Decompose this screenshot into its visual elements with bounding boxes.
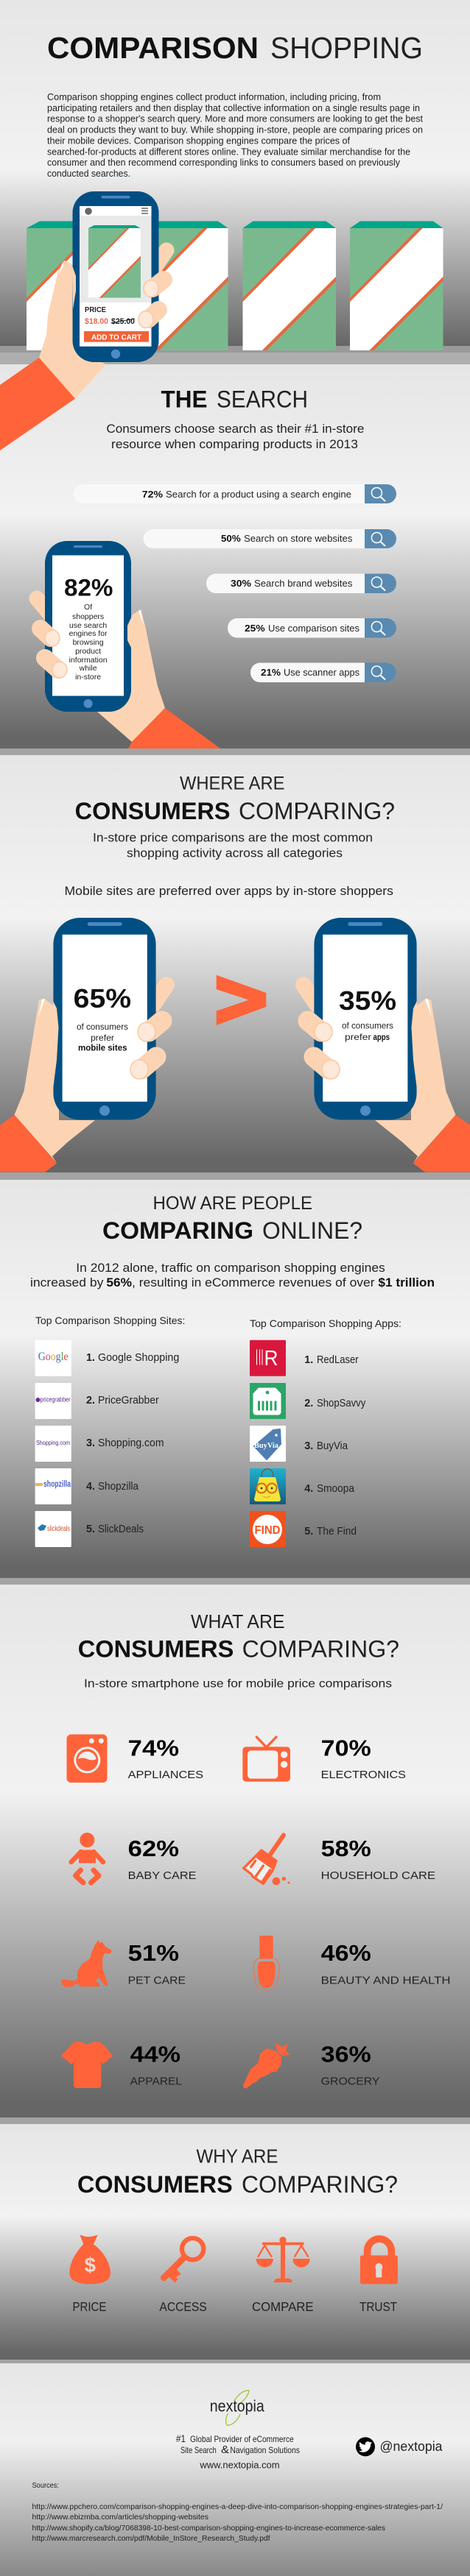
box 1 — [27, 221, 119, 350]
phone screen with stat: engines for — [69, 629, 108, 638]
phone screen with stat: while — [79, 664, 97, 673]
app 3: buyvia: 3. — [304, 1440, 313, 1452]
heading: where are consumers comparing: COMPARING? — [239, 798, 395, 824]
phone screen with stat: use search — [69, 621, 107, 630]
category: electronics: ELECTRONICS — [321, 1769, 406, 1781]
online subtitle: $1 trillion — [378, 1275, 435, 1289]
phone screen: PRICE — [85, 306, 106, 314]
search subtitle: resource when comparing products in 2013 — [111, 437, 358, 451]
intro paragraph: consumer and then recommend corresponding links to consumers based on previously — [47, 158, 401, 168]
app 3: buyvia — [250, 1426, 348, 1462]
site 5: slickdeals — [35, 1511, 144, 1547]
search bar 30% — [206, 574, 396, 593]
category: appliances: APPLIANCES — [128, 1769, 203, 1781]
reason: trust: TRUST — [359, 2299, 397, 2314]
search bar 21% — [250, 662, 396, 682]
hand holding phone with product — [0, 191, 166, 450]
stat: 35% — [339, 986, 396, 1042]
search bar 30%: Search brand websites — [254, 578, 353, 589]
where subtitle: Mobile sites are preferred over apps by in-store shoppers — [65, 884, 393, 898]
site 4: shopzilla: shopzilla — [43, 1479, 71, 1489]
nextopia logo: nextopia — [210, 2397, 264, 2416]
sources: http://www.ppchero.com/comparison-shopping-engines-a-deep-dive-into-comparison-shopping-engines-strategies-part-1/ — [32, 2502, 443, 2511]
search bar 72%: 72% — [142, 489, 163, 500]
intro paragraph: their mobile devices. Comparison shopping engines compare the prices of — [47, 135, 351, 146]
app 1: redlaser — [250, 1340, 359, 1376]
company tagline: Site Search — [180, 2445, 217, 2455]
app 4: smoopa: Smoopa — [317, 1482, 355, 1495]
sources: http://www.ebizmba.com/articles/shopping-websites — [32, 2513, 208, 2522]
top comparison shopping sites — [35, 1314, 185, 1547]
site 5: slickdeals: slickdeals — [47, 1525, 70, 1533]
company tagline — [176, 2432, 300, 2471]
icon: broom — [244, 1835, 290, 1885]
thumb overlap — [127, 609, 147, 648]
search bar 21%: 21% — [261, 667, 281, 678]
site 1: google — [35, 1340, 179, 1376]
finger behind phone — [153, 985, 166, 1005]
heading: how are people comparing online — [102, 1193, 362, 1244]
category: household care — [244, 1835, 435, 1885]
site 5: slickdeals: SlickDeals — [98, 1523, 144, 1535]
reason: access: ACCESS — [159, 2299, 207, 2314]
thumb overlap — [53, 1001, 59, 1089]
reason: access — [159, 2238, 207, 2314]
heading: how are people comparing online: COMPARING — [102, 1217, 253, 1244]
icon: nail polish — [253, 1936, 279, 1990]
phone screen with stat: 82% — [64, 575, 113, 601]
stat: 65%: prefer — [91, 1033, 114, 1043]
company tagline: & — [221, 2444, 229, 2456]
phone screen with stat: in-store — [75, 673, 101, 682]
phone screen: ADD TO CART — [91, 334, 141, 342]
stat: 35%: 35% — [339, 986, 396, 1016]
top comparison shopping apps — [250, 1317, 401, 1547]
heading: where are consumers comparing — [75, 774, 395, 824]
intro paragraph — [47, 92, 424, 179]
finger lower — [130, 1057, 156, 1079]
sources: Sources: — [32, 2481, 59, 2490]
site 1: google: Google — [38, 1351, 69, 1363]
stat: 65% — [74, 983, 131, 1052]
heading: how are people comparing online: ONLINE? — [262, 1217, 362, 1244]
category: grocery — [243, 2042, 380, 2088]
icon: television — [242, 1737, 290, 1782]
twitter handle — [356, 2437, 443, 2456]
phone screen: $18.00 — [85, 317, 108, 326]
category: baby care — [71, 1833, 197, 1883]
finger middle — [41, 629, 60, 646]
search subtitle — [106, 422, 364, 451]
search bar 25% — [228, 618, 396, 637]
category: household care: 58% — [321, 1836, 371, 1861]
site 3: shopping.com: 3. — [86, 1437, 95, 1449]
sleeve — [0, 1115, 57, 1172]
greater-than sign — [217, 975, 266, 1025]
search subtitle: Consumers choose search as their #1 in-store — [106, 422, 364, 436]
intro paragraph: conducted searches. — [47, 169, 130, 179]
app 3: buyvia: BuyVia — [254, 1442, 278, 1450]
stat: 35%: prefer — [345, 1032, 371, 1042]
intro paragraph: searched-for-products at different stores online. They evaluate similar merchandise for the — [47, 147, 410, 158]
sources: http://www.marcresearch.com/pdf/Mobile_InStore_Research_Study.pdf — [32, 2534, 270, 2543]
phone body — [72, 191, 159, 362]
title — [47, 31, 423, 65]
reason: compare — [252, 2237, 314, 2314]
product boxes on shelf — [27, 221, 443, 350]
nextopia logo — [210, 2391, 264, 2425]
heading: why are consumers comparing: WHY ARE — [196, 2146, 278, 2167]
icon: dog — [61, 1940, 112, 1987]
finger behind phone — [37, 598, 50, 615]
heading: what are consumers comparing: COMPARING? — [242, 1635, 399, 1662]
left hand and phone: mobile sites — [0, 918, 166, 1172]
icon: money bag: $ — [85, 2254, 96, 2276]
heading: why are consumers comparing — [77, 2146, 398, 2198]
title: SHOPPING — [270, 31, 423, 65]
category: appliances — [66, 1734, 203, 1783]
heading: how are people comparing online: HOW ARE PEOPLE — [153, 1193, 312, 1214]
heading: the search: SEARCH — [217, 386, 308, 413]
palm — [15, 999, 95, 1163]
icon: twitter — [356, 2437, 375, 2456]
stat: 35%: apps — [373, 1032, 390, 1042]
phone body — [45, 541, 131, 712]
box 4 — [350, 221, 443, 350]
site 1: google: Google Shopping — [98, 1351, 179, 1364]
icon: padlock — [360, 2239, 398, 2284]
online subtitle — [30, 1261, 435, 1289]
icon: t-shirt — [61, 2042, 113, 2088]
palm and thumb — [97, 609, 165, 742]
heading: what are consumers comparing: WHAT ARE — [191, 1610, 284, 1632]
stat: 65%: 65% — [74, 983, 131, 1013]
site 3: shopping.com: Shopping.com — [98, 1437, 164, 1449]
phone screen — [80, 196, 152, 358]
search bar 50% — [143, 529, 396, 548]
category: grocery: GROCERY — [321, 2076, 380, 2087]
online subtitle: , resulting in eCommerce revenues of over — [132, 1275, 375, 1289]
site 4: shopzilla — [35, 1468, 139, 1504]
search bar 21%: Use scanner apps — [284, 667, 359, 678]
phone — [53, 918, 156, 1120]
icon: washing machine — [66, 1734, 108, 1783]
where subtitle: shopping activity across all categories — [127, 846, 343, 860]
app 2: shopsavvy: ShopSavvy — [317, 1397, 366, 1409]
app 4: smoopa: 4. — [304, 1482, 313, 1495]
company tagline: Navigation Solutions — [230, 2445, 300, 2455]
heading: where are consumers comparing: CONSUMERS — [75, 798, 230, 824]
app 1: redlaser: 1. — [304, 1354, 313, 1366]
app 1: redlaser: RedLaser — [317, 1354, 359, 1366]
app 5: the find: The Find — [317, 1525, 357, 1538]
category: pet care: PET CARE — [128, 1975, 186, 1987]
sleeve — [0, 358, 75, 450]
site 4: shopzilla: 4. — [86, 1480, 95, 1493]
site 3: shopping.com: Shopping.com — [36, 1440, 70, 1446]
search bar 25%: 25% — [245, 623, 265, 634]
stat: 65%: of consumers — [77, 1022, 128, 1032]
app 4: smoopa — [250, 1468, 355, 1504]
category: baby care: 62% — [128, 1836, 179, 1861]
where subtitle — [65, 830, 393, 898]
intro paragraph: Comparison shopping engines collect product information, including pricing, from — [47, 92, 381, 102]
category: beauty and health: BEAUTY AND HEALTH — [321, 1975, 451, 1987]
finger behind phone — [152, 250, 166, 271]
site 2: pricegrabber: PriceGrabber — [98, 1394, 159, 1406]
app 1: redlaser: R — [264, 1347, 278, 1370]
search bar 50%: 50% — [221, 533, 241, 544]
category: electronics: 70% — [321, 1735, 371, 1761]
reason: price — [69, 2235, 111, 2314]
category: appliances: 74% — [128, 1735, 179, 1761]
category: apparel: 44% — [130, 2042, 180, 2067]
online subtitle: increased by — [30, 1275, 104, 1289]
right hand and phone: apps — [304, 918, 470, 1172]
reason: price: PRICE — [72, 2299, 106, 2314]
twitter handle: @nextopia — [380, 2439, 443, 2454]
search bar 72% — [74, 484, 396, 503]
category: grocery: 36% — [321, 2042, 371, 2067]
stat: 35%: of consumers — [342, 1020, 393, 1030]
search bar 72%: Search for a product using a search engine — [166, 489, 351, 500]
site 2: pricegrabber: pricegrabber — [40, 1395, 71, 1403]
top comparison shopping sites: Top Comparison Shopping Sites: — [35, 1314, 185, 1326]
heading: why are consumers comparing: COMPARING? — [242, 2171, 398, 2198]
box 2 — [135, 221, 228, 350]
category: apparel: APPAREL — [130, 2076, 182, 2087]
where subtitle: In-store price comparisons are the most common — [93, 830, 373, 844]
intro paragraph: deal on products they want to buy. While shopping in-store, people are comparing prices on — [47, 125, 423, 135]
icon: carrot — [243, 2042, 290, 2088]
hand holding phone: 82% — [37, 541, 220, 749]
search bar 25%: Use comparison sites — [268, 623, 359, 634]
finger middle — [144, 280, 164, 297]
palm — [39, 261, 106, 399]
finger middle — [138, 1021, 162, 1041]
category: pet care: 51% — [128, 1940, 179, 1966]
category: baby care: BABY CARE — [128, 1870, 197, 1882]
phone screen with stat: information — [69, 656, 108, 665]
company tagline: www.nextopia.com — [199, 2460, 280, 2471]
what subtitle: In-store smartphone use for mobile price comparisons — [84, 1678, 392, 1691]
category: household care: HOUSEHOLD CARE — [321, 1870, 435, 1882]
app 3: buyvia: BuyVia — [317, 1440, 348, 1452]
site 5: slickdeals: 5. — [86, 1523, 95, 1535]
mirrored hand and phone — [304, 918, 470, 1172]
search bar 30%: 30% — [231, 578, 251, 589]
box 3 — [243, 221, 336, 350]
phone screen with stat: Of — [84, 603, 92, 612]
online subtitle: In 2012 alone, traffic on comparison shopping engines — [76, 1261, 385, 1275]
category: beauty and health: 46% — [321, 1940, 371, 1966]
phone screen with stat: product — [75, 647, 101, 656]
sources: http://www.shopify.ca/blog/7068398-10-best-comparison-shopping-engines-to-increase-ecommerce-sales — [32, 2524, 385, 2533]
category: pet care — [61, 1940, 186, 1987]
heading: where are consumers comparing: WHERE ARE — [180, 774, 284, 794]
online subtitle: 56% — [106, 1275, 132, 1289]
site 2: pricegrabber: 2. — [86, 1394, 95, 1406]
heading: what are consumers comparing: CONSUMERS — [78, 1635, 234, 1662]
category: beauty and health — [253, 1936, 451, 1990]
phone screen with stat: browsing — [73, 638, 104, 647]
icon: balance scales — [256, 2237, 310, 2282]
app 2: shopsavvy — [250, 1383, 366, 1419]
finger lower — [45, 658, 67, 678]
heading: the search: THE — [161, 386, 208, 413]
intro paragraph: response to a shopper's search query. More and more consumers are looking to get the best — [47, 113, 424, 124]
mini product box — [88, 225, 141, 298]
phone screen with stat: shoppers — [72, 612, 104, 621]
category: apparel — [61, 2042, 182, 2088]
heading: the search — [161, 386, 308, 413]
site 4: shopzilla: Shopzilla — [98, 1480, 139, 1493]
top comparison shopping apps: Top Comparison Shopping Apps: — [250, 1317, 401, 1329]
intro paragraph: participating retailers and then display that collective information on a single results page in — [47, 103, 420, 113]
reason: compare: COMPARE — [252, 2299, 314, 2314]
sources — [32, 2481, 443, 2543]
stat: 65%: mobile sites — [78, 1042, 127, 1052]
reason: trust — [359, 2239, 398, 2314]
site 2: pricegrabber — [35, 1383, 159, 1419]
site 1: google: 1. — [86, 1351, 95, 1364]
title: COMPARISON — [47, 31, 259, 65]
thumb — [58, 261, 76, 309]
category: electronics — [242, 1735, 406, 1782]
search bar 50%: Search on store websites — [244, 533, 353, 544]
app 5: the find: 5. — [304, 1525, 313, 1538]
icon: key — [164, 2238, 203, 2283]
company tagline: #1 — [176, 2432, 186, 2444]
phone screen: $25.00 — [111, 317, 135, 326]
heading: what are consumers comparing — [78, 1610, 399, 1662]
app 5: the find: FIND — [255, 1524, 280, 1537]
finger lower — [138, 310, 158, 328]
icon: baby — [71, 1833, 103, 1883]
site 3: shopping.com — [35, 1426, 164, 1462]
company tagline: Global Provider of eCommerce — [190, 2434, 294, 2444]
sleeve — [128, 708, 220, 749]
app 2: shopsavvy: 2. — [304, 1397, 313, 1409]
heading: why are consumers comparing: CONSUMERS — [77, 2171, 233, 2198]
phone screen with stat — [52, 545, 124, 708]
app 5: the find — [250, 1511, 357, 1547]
